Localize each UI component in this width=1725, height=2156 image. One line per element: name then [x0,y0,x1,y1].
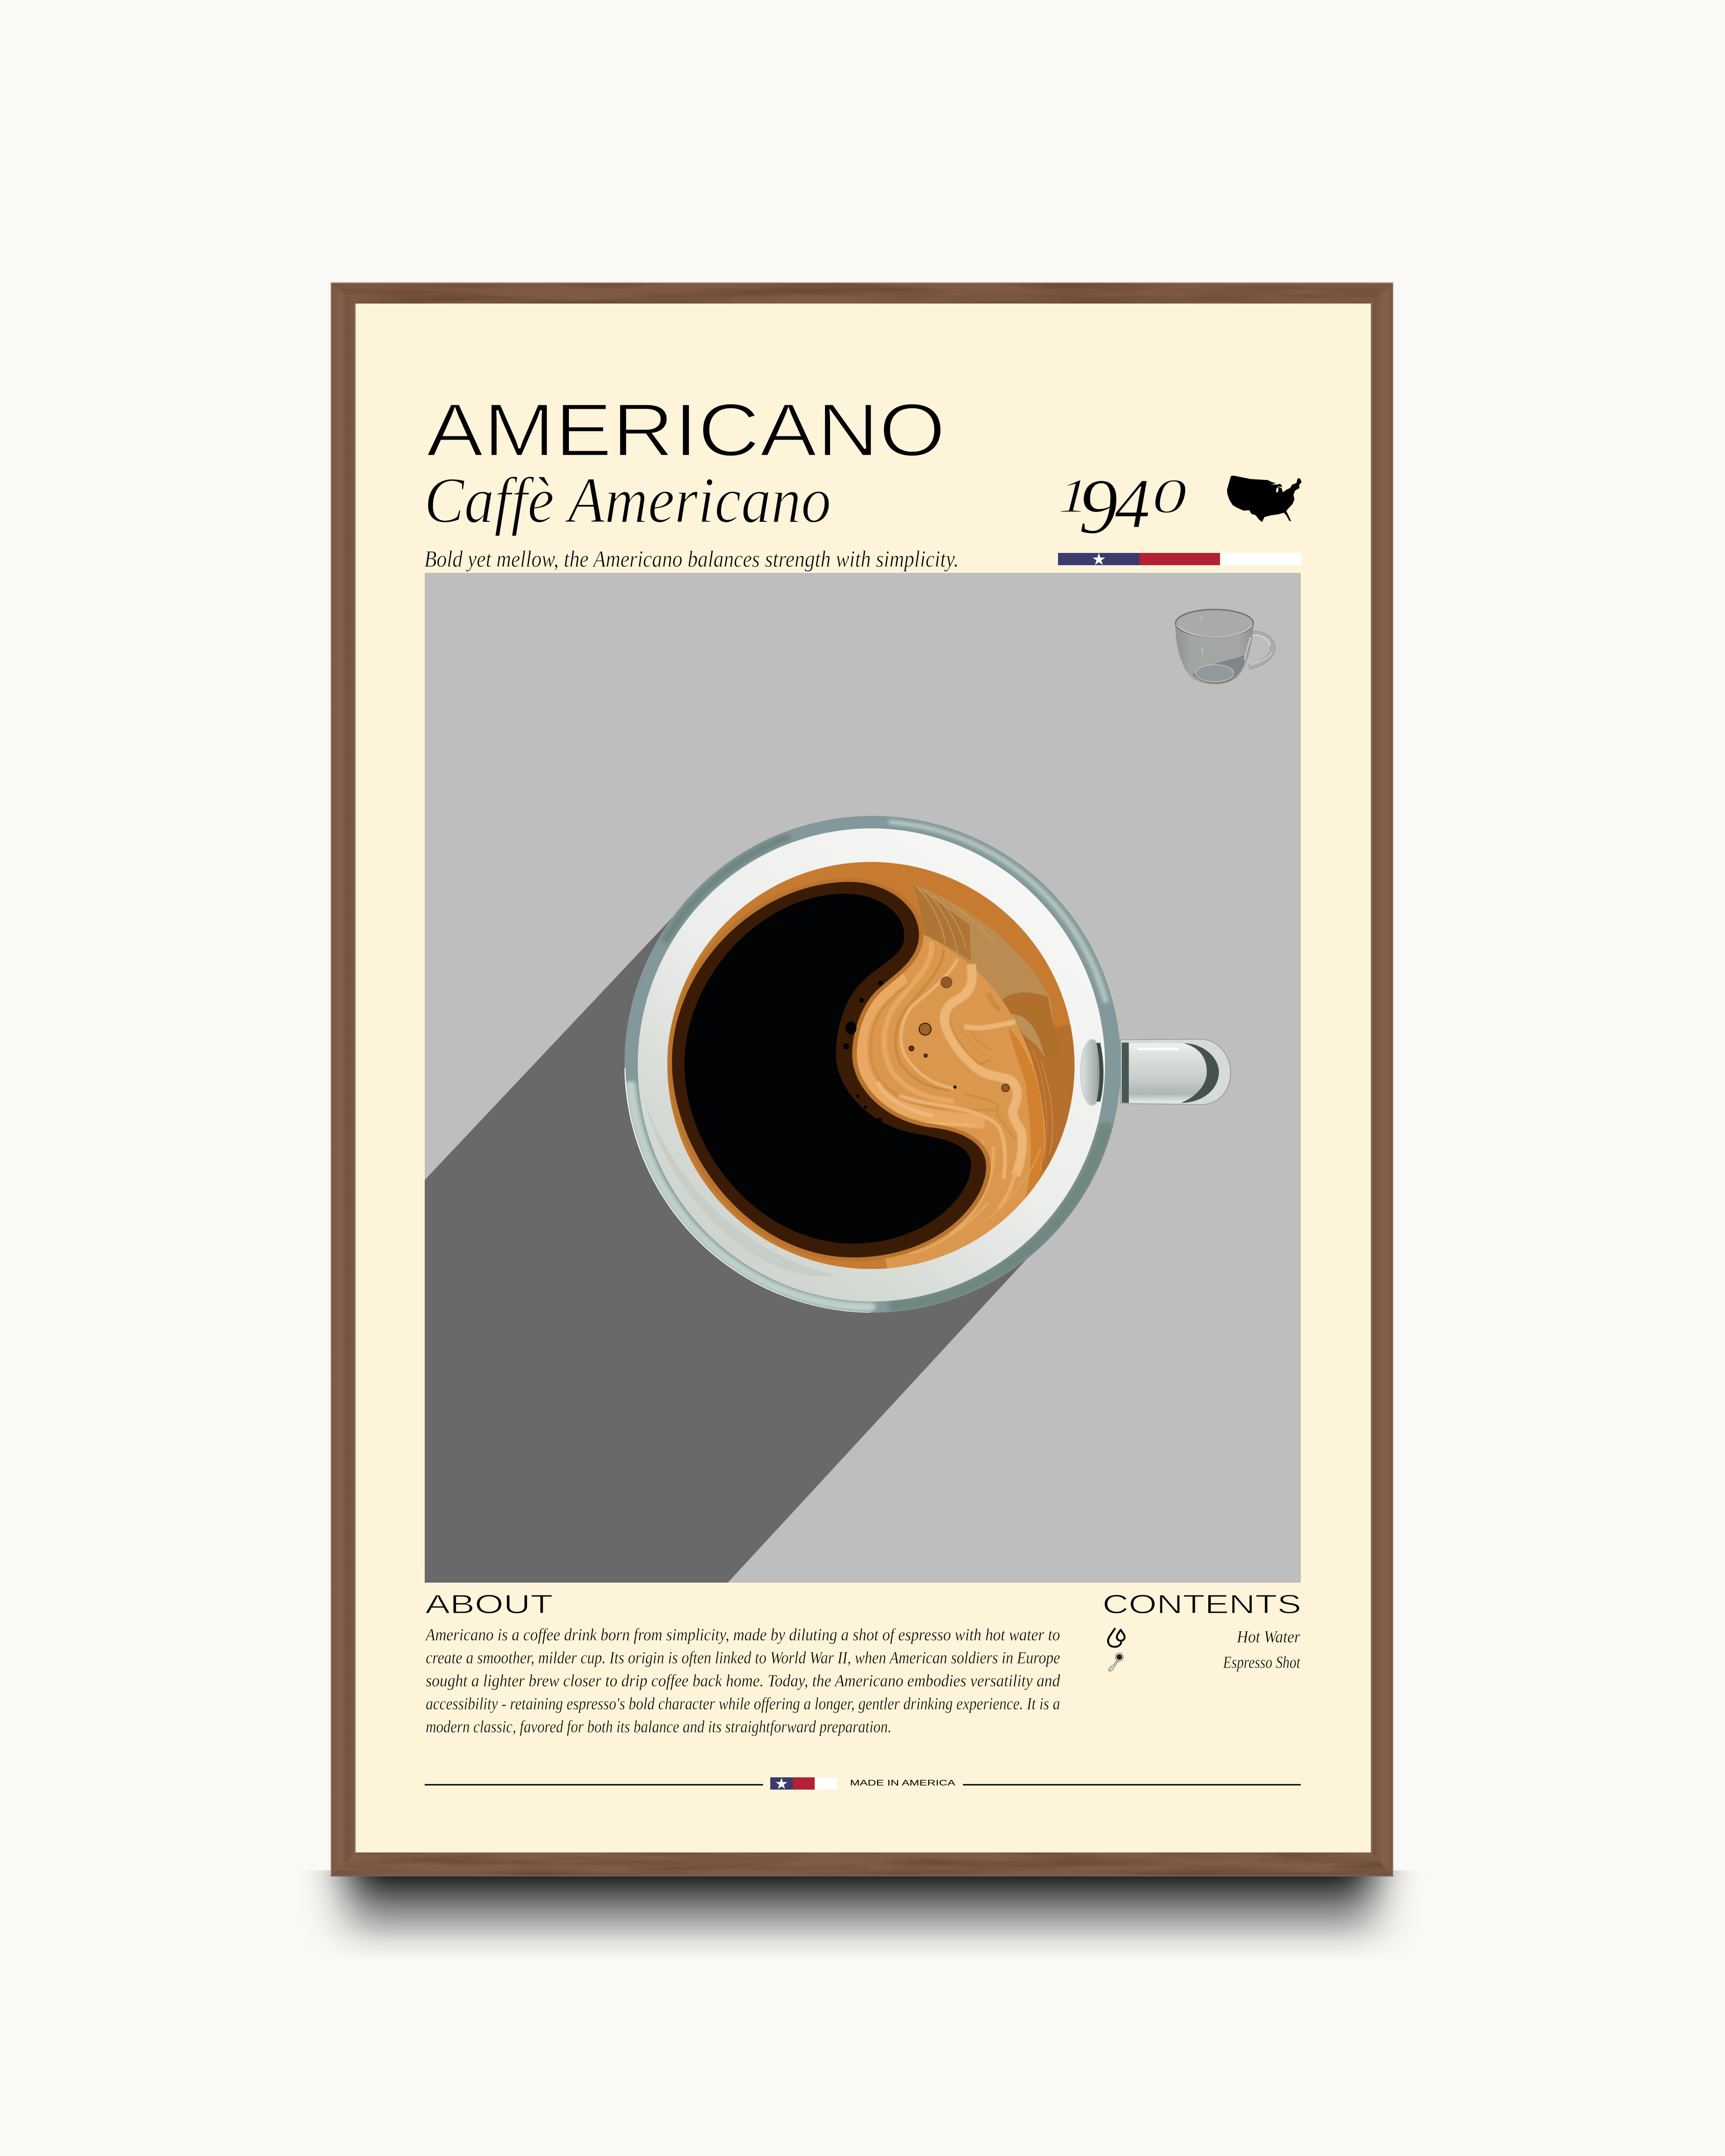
icon: star [1093,553,1105,565]
year: 1 [1052,469,1095,523]
text block: about: Americano is a coffee drink born from simplicity, made by diluting a shot of espresso with hot water to [425,1626,1060,1644]
coffee edge [672,882,986,1258]
year: 9 [1078,462,1118,550]
footer label: MADE IN AMERICA [850,1779,955,1788]
icon: handle joint knob [1081,1039,1103,1105]
foam streaks [860,942,1041,1254]
text block: about [425,1626,1061,1736]
cup cast shadow [425,910,1043,1583]
pale reflection [913,885,1052,1056]
poster paper [356,304,1371,1852]
panel: illustration [425,573,1301,1583]
icon: glass cup [1175,610,1273,685]
icon: cup handle [1120,1039,1231,1105]
crema [668,862,1074,1269]
footer rule right [963,1784,1301,1786]
contents label: hot water: Hot Water [1236,1628,1301,1647]
heading: contents: CONTENTS [1102,1590,1301,1619]
frame drop shadow [348,1870,1375,1960]
icon: water drops [1108,1629,1124,1647]
icon: USA map [1227,476,1302,522]
contents label: espresso shot: Espresso Shot [1223,1653,1301,1672]
espresso swirl base [838,934,1045,1278]
dark coffee [672,882,986,1258]
wooden frame [331,282,1393,1876]
orange band [1008,1027,1044,1172]
heading: about: ABOUT [425,1590,553,1619]
glass rim [625,816,1121,1313]
tagline: Bold yet mellow, the Americano balances strength with simplicity. [424,546,959,572]
text block: about: accessibility - retaining espresso's bold character while offering a longer, gentler drinking experience. It is a [426,1695,1060,1713]
flag bar [1058,553,1301,565]
subtitle: Caffè Americano [424,464,831,537]
title: AMERICANO [426,388,946,472]
text block: about: modern classic, favored for both its balance and its straightforward preparation. [426,1718,891,1736]
text block: about: create a smoother, milder cup. Its origin is often linked to World War II, when American soldiers in Europe [426,1649,1060,1667]
year: 4 [1115,465,1150,543]
bubbles [843,977,1009,1122]
darker crema right band [1021,1024,1074,1171]
text block: about: sought a lighter brew closer to drip coffee back home. Today, the Americano embodies versatility and [426,1672,1061,1690]
year: 0 [1152,469,1187,523]
coffee cup top view [617,816,1231,1313]
icon: portafilter [1109,1653,1123,1671]
black coffee [684,894,971,1243]
year [1052,462,1187,550]
footer rule left [425,1784,763,1786]
icon: footer star [776,1778,787,1789]
footer flag [770,1777,837,1790]
white inner wall [638,828,1105,1302]
